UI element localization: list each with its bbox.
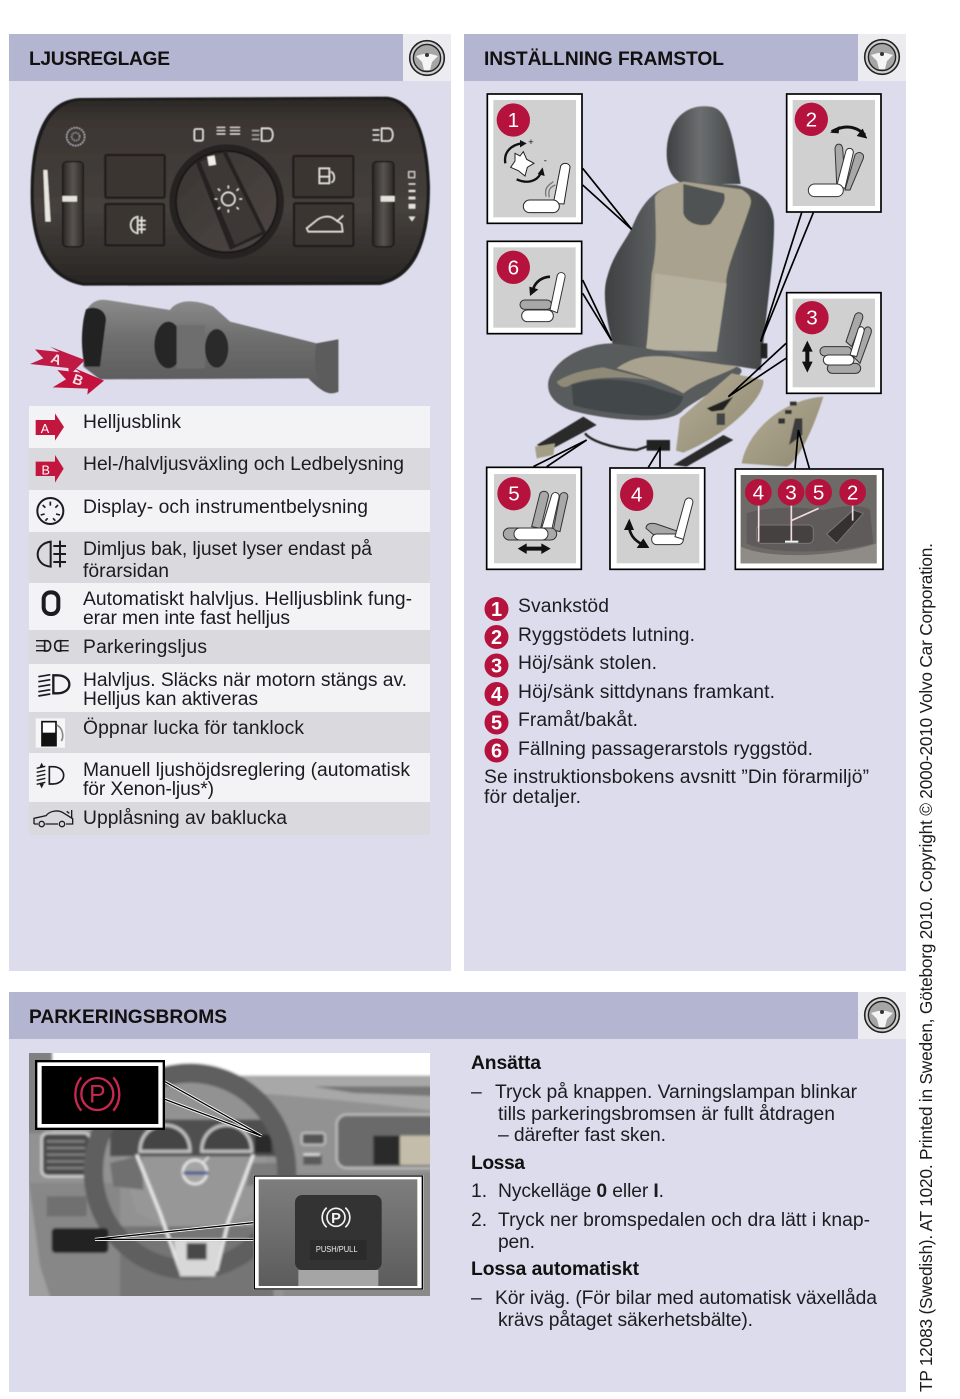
arrows A and B on stalk: [30, 347, 104, 395]
table text: Display- och instrumentbelysning: [83, 497, 368, 518]
numbered list: 3: [491, 656, 502, 678]
parking brake instructions: –: [471, 1082, 482, 1103]
parking brake instructions: 1.: [471, 1181, 487, 1202]
callout 6: [487, 241, 582, 334]
parking brake instructions: [471, 1053, 877, 1331]
light switch panel: [31, 97, 430, 286]
numbered list: för detaljer.: [484, 787, 581, 808]
icon: steering wheel: [410, 41, 444, 75]
table text: Automatiskt halvljus. Helljusblink fung-: [83, 589, 412, 610]
push/pull button callout: [95, 1175, 423, 1290]
table text: Manuell ljushöjdsreglering (automatisk: [83, 760, 410, 781]
callout switches 4 3 5 2: [735, 469, 883, 569]
callout 1: +: [528, 137, 534, 147]
table text: [83, 412, 412, 829]
callout 3: 3: [806, 307, 818, 330]
table text: Hel-/halvljusväxling och Ledbelysning: [83, 454, 404, 475]
callout 1: -: [544, 155, 547, 165]
leader lines: [533, 168, 813, 468]
table icons: [34, 413, 73, 827]
stalk lever: [82, 300, 338, 393]
numbered list: Se instruktionsbokens avsnitt ”Din förarmiljö”: [484, 767, 869, 788]
parking brake instructions: –: [471, 1288, 482, 1309]
table text: förarsidan: [83, 561, 169, 582]
parking brake instructions: Lossa: [471, 1153, 525, 1174]
callout switches 4 3 5 2: 2: [847, 481, 858, 504]
table text: erar men inte fast helljus: [83, 608, 290, 629]
table text: för Xenon-ljus*): [83, 779, 214, 800]
warning callout: P: [89, 1082, 106, 1109]
numbered list: 2: [491, 627, 502, 649]
heading band: ljusreglage: LJUSREGLAGE: [29, 49, 170, 70]
callout 6: 6: [508, 256, 519, 279]
numbered list: Svankstöd: [518, 596, 609, 617]
heading band: inställning framstol: [464, 34, 906, 81]
table text: Helljusblink: [83, 412, 181, 433]
table: light controls: [29, 406, 430, 835]
callout 1: [487, 94, 582, 223]
callout 2: 2: [806, 108, 817, 131]
vertical copyright text: TP 12083 (Swedish). AT 1020. Printed in Sweden, Göteborg 2010. Copyright © 2000-2010 Volvo Car Corporation.: [916, 543, 936, 1392]
heading band: ljusreglage: [9, 34, 451, 81]
table icons: A: [41, 422, 50, 436]
parking brake instructions: krävs påtaget säkerhetsbälte).: [498, 1309, 753, 1331]
parking brake instructions: Nyckelläge 0 eller I.: [498, 1181, 664, 1202]
parking brake instructions: pen.: [498, 1232, 535, 1253]
parking brake instructions: Tryck ner bromspedalen och dra lätt i knap-: [498, 1210, 870, 1231]
numbered list: 4: [491, 684, 503, 706]
parking brake instructions: Kör iväg. (För bilar med automatisk växellåda: [495, 1287, 877, 1309]
heading band: parkeringsbroms: PARKERINGSBROMS: [29, 1007, 227, 1028]
parking brake instructions: Tryck på knappen. Varningslampan blinkar: [495, 1081, 858, 1103]
table text: Dimljus bak, ljuset lyser endast på: [83, 538, 372, 560]
callout 1: 1: [508, 109, 519, 132]
callout 4: [610, 468, 705, 569]
numbered list: Fällning passagerarstols ryggstöd.: [518, 739, 813, 760]
numbered list: Framåt/bakåt.: [518, 709, 638, 731]
callout 5: 5: [508, 483, 520, 506]
table text: Upplåsning av baklucka: [83, 807, 287, 829]
numbered list: 6: [491, 740, 502, 762]
table text: Halvljus. Släcks när motorn stängs av.: [83, 670, 407, 691]
parking brake instructions: Lossa automatiskt: [471, 1259, 640, 1280]
numbered list: Höj/sänk stolen.: [518, 653, 657, 674]
panel: parkeringsbroms: [9, 992, 906, 1392]
table text: Parkeringsljus: [83, 637, 207, 658]
push/pull button callout: P: [331, 1211, 341, 1227]
icon: steering wheel: [865, 998, 899, 1032]
numbered list: 5: [491, 712, 502, 734]
numbered list: Ryggstödets lutning.: [518, 625, 695, 646]
warning callout: [35, 1060, 262, 1136]
callout switches 4 3 5 2: 3: [785, 481, 797, 504]
parking brake instructions: – därefter fast sken.: [498, 1125, 666, 1146]
callout 2: [787, 94, 881, 212]
numbered list: 1: [491, 599, 502, 621]
heading band: parkeringsbroms: [9, 992, 906, 1039]
arrows A and B on stalk: B: [71, 370, 86, 389]
dashboard photo: [29, 1053, 430, 1296]
callout switches 4 3 5 2: 4: [753, 481, 764, 504]
table text: Helljus kan aktiveras: [83, 689, 258, 710]
parking brake instructions: Ansätta: [471, 1053, 541, 1074]
callout 5: [487, 467, 581, 569]
icon: steering wheel: [865, 40, 899, 74]
numbered list: Höj/sänk sittdynans framkant.: [518, 682, 775, 703]
callout 3: [787, 293, 881, 393]
parking brake instructions: 2.: [471, 1210, 487, 1231]
parking brake instructions: tills parkeringsbromsen är fullt åtdragen: [498, 1103, 835, 1125]
push/pull button callout: PUSH/PULL: [316, 1245, 358, 1254]
numbered list: [484, 596, 869, 808]
panel: inställning framstol: [464, 34, 906, 971]
table icons: B: [41, 464, 50, 478]
callout switches 4 3 5 2: 5: [813, 481, 824, 504]
heading band: inställning framstol: INSTÄLLNING FRAMSTOL: [484, 49, 724, 70]
callout 4: 4: [631, 483, 642, 506]
table text: Öppnar lucka för tanklock: [83, 717, 304, 739]
panel: ljusreglage: [9, 34, 451, 971]
seat illustration: [535, 106, 823, 467]
arrows A and B on stalk: A: [49, 350, 64, 368]
